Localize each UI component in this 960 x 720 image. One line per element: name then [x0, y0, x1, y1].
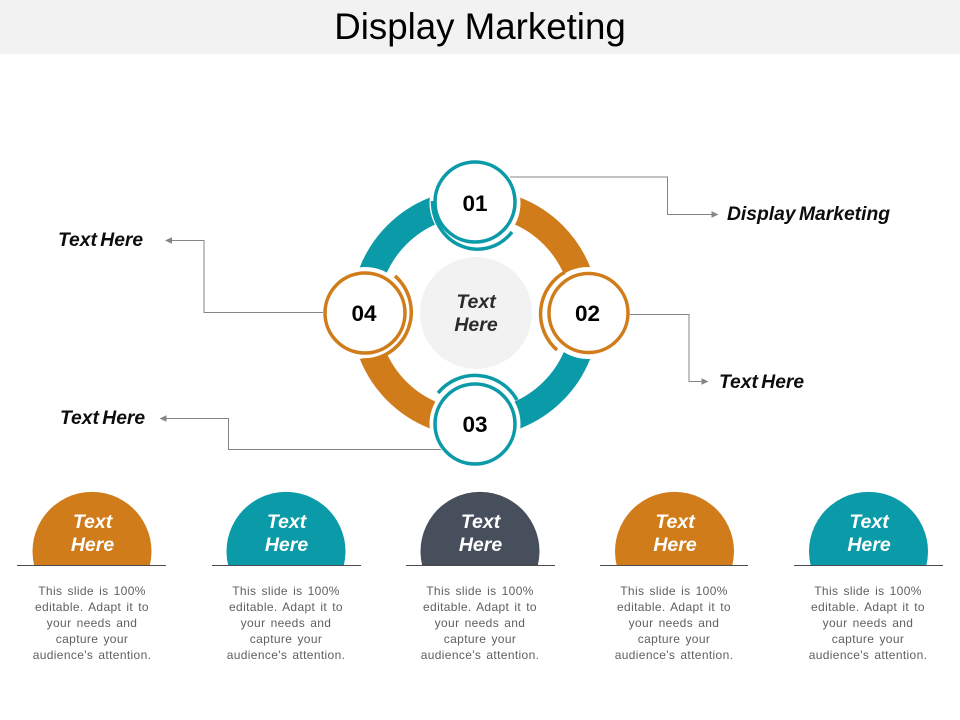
panel: column 5: Here: [847, 534, 891, 556]
panel: column 3: [406, 492, 555, 662]
panel: column 2: Text: [267, 511, 308, 533]
description: your needs and: [241, 616, 331, 630]
description: This slide is 100%: [814, 584, 922, 598]
description: [809, 584, 927, 662]
description: [421, 584, 539, 662]
connector arrow: 03 to Text Here: [160, 415, 441, 450]
ring segment: top right orange: [475, 202, 586, 313]
semicircle badge: [809, 492, 928, 566]
description: [227, 584, 345, 662]
description: audience's attention.: [227, 648, 345, 662]
node 04: 04: [351, 301, 377, 326]
panel: column 4: [600, 492, 748, 662]
description: capture your: [832, 632, 904, 646]
description: your needs and: [47, 616, 137, 630]
label: right Text Here: Text Here: [719, 372, 804, 393]
semicircle badge: [615, 492, 734, 566]
panel: column 4: Here: [653, 534, 697, 556]
center circle: Text: [456, 291, 497, 313]
title band: Display Marketing: [334, 6, 626, 47]
center circle: Here: [454, 314, 498, 336]
description: audience's attention.: [33, 648, 151, 662]
semicircle badge: [33, 492, 151, 566]
panel: column 4: Text: [655, 511, 696, 533]
description: editable. Adapt it to: [811, 600, 925, 614]
description: [33, 584, 151, 662]
description: This slide is 100%: [620, 584, 728, 598]
ring segment: bottom right teal: [475, 313, 586, 424]
connector arrow: 02 to Text Here: [630, 314, 708, 385]
description: capture your: [444, 632, 516, 646]
description: editable. Adapt it to: [229, 600, 343, 614]
panel: column 2: Here: [265, 534, 308, 556]
description: audience's attention.: [421, 648, 539, 662]
description: your needs and: [629, 616, 719, 630]
semicircle badge: [226, 492, 345, 566]
ring segment: bottom left orange: [364, 313, 475, 424]
node 03: 03: [462, 412, 488, 437]
description: capture your: [638, 632, 710, 646]
description: capture your: [250, 632, 322, 646]
panel: column 5: [794, 492, 943, 662]
ring diagram: [319, 158, 634, 470]
panel: column 5: Text: [849, 511, 890, 533]
description: audience's attention.: [809, 648, 927, 662]
semicircle badge: [420, 492, 540, 566]
description: editable. Adapt it to: [35, 600, 149, 614]
description: This slide is 100%: [38, 584, 146, 598]
label: Display Marketing: Display Marketing: [727, 204, 890, 225]
node 02: 02: [575, 301, 600, 326]
panel: column 2: [212, 492, 361, 662]
description: This slide is 100%: [426, 584, 534, 598]
description: This slide is 100%: [232, 584, 340, 598]
description: editable. Adapt it to: [423, 600, 537, 614]
title band: [0, 0, 960, 54]
description: capture your: [56, 632, 128, 646]
node 04: [319, 267, 411, 360]
panel: column 1: [17, 492, 166, 662]
panel: column 1: Here: [71, 534, 114, 556]
label: upper left Text Here: Text Here: [58, 230, 143, 251]
node 01: 01: [462, 191, 488, 216]
node 03: [430, 375, 520, 470]
connector arrow: 01 to Display Marketing: [510, 177, 718, 218]
panel: column 3: Here: [459, 534, 502, 556]
ring segment: top left teal: [364, 202, 475, 313]
panel: column 1: Text: [73, 511, 114, 533]
description: your needs and: [435, 616, 525, 630]
connector arrow: 04 to Text Here: [165, 237, 323, 312]
description: your needs and: [823, 616, 913, 630]
center circle: [420, 257, 532, 369]
description: [615, 584, 733, 662]
label: lower left Text Here: Text Here: [60, 408, 145, 429]
description: editable. Adapt it to: [617, 600, 731, 614]
panel: column 3: Text: [461, 511, 502, 533]
node 01: [430, 158, 520, 249]
description: audience's attention.: [615, 648, 733, 662]
node 02: [541, 267, 634, 359]
